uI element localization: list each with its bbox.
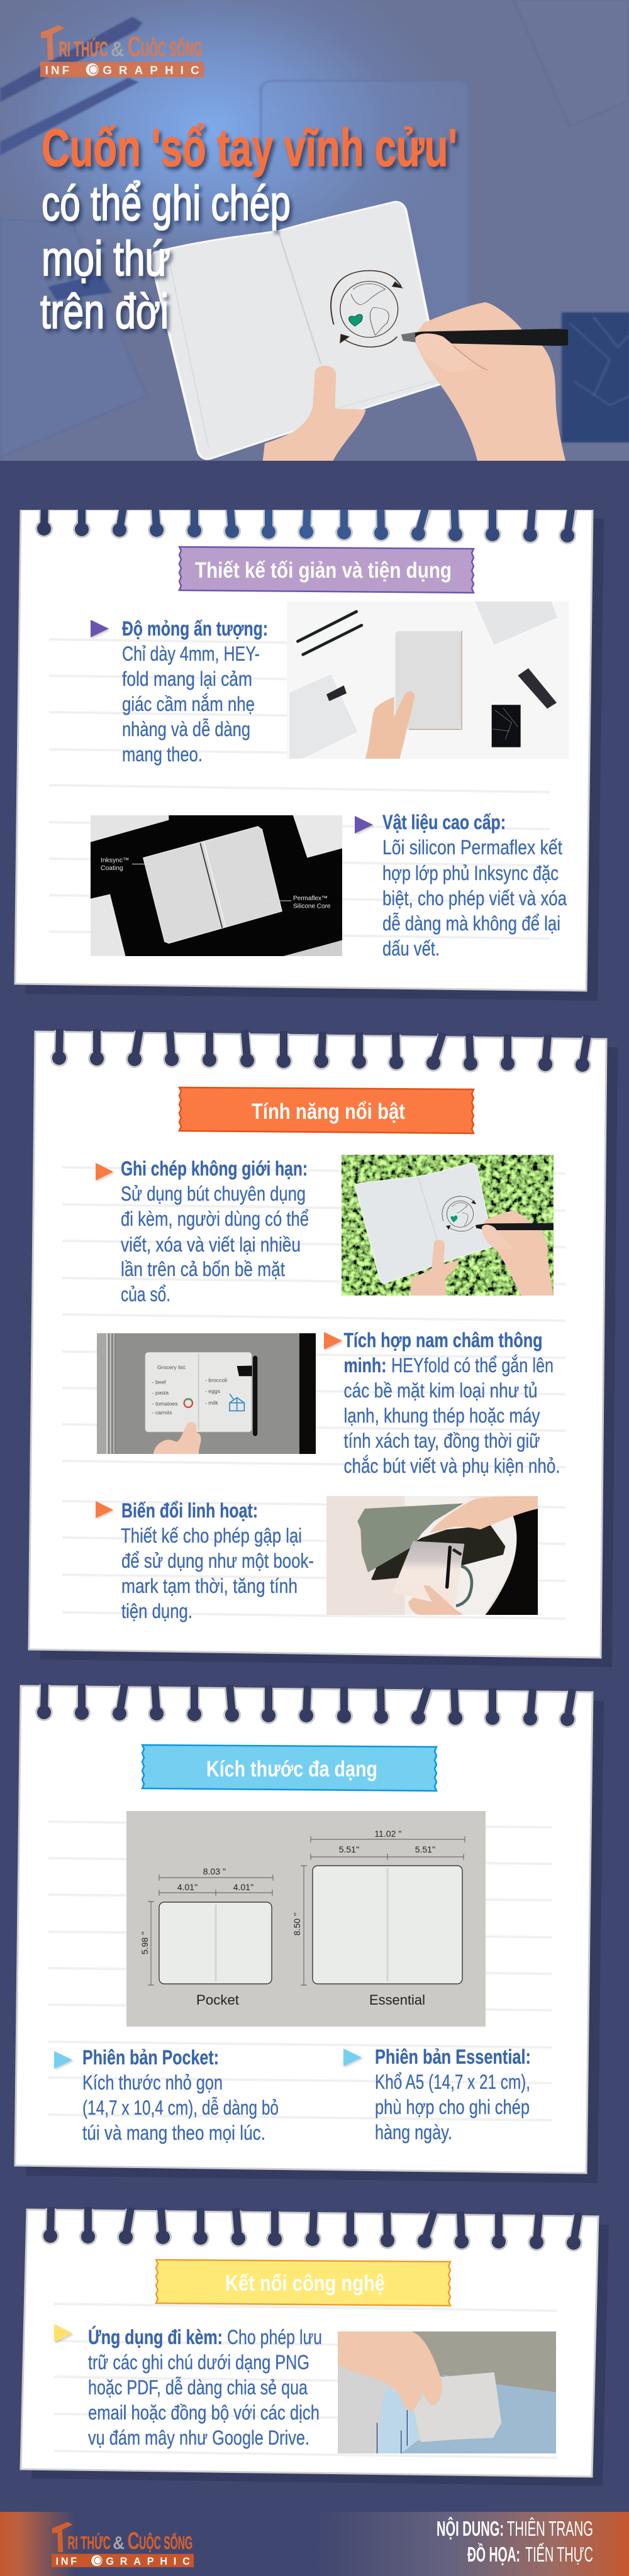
text: phiên bản essential: hàng ngày. xyxy=(375,2121,452,2144)
text: tích hợp nam châm thông minh: Tích hợp nam châm thông xyxy=(343,1329,542,1351)
icon: orange triangle xyxy=(324,1332,342,1350)
text: phiên bản pocket: Phiên bản Pocket: xyxy=(82,2046,219,2069)
text: biến đổi linh hoạt: Thiết kế cho phép gập lại xyxy=(121,1524,302,1547)
footer logo: INF xyxy=(56,2556,77,2567)
logo: Tri Thuc & Cuoc Song Infographic: & xyxy=(111,38,124,61)
footer logo: UỘC SỐNG xyxy=(139,2532,192,2553)
text: tích hợp nam châm thông minh: minh: xyxy=(343,1354,386,1377)
text: ghi chép không giới hạn: Sử dụng bút chuyên dụng xyxy=(121,1182,306,1205)
binder rings xyxy=(59,1029,587,1065)
icon: blue triangle xyxy=(343,2049,362,2066)
text: tích hợp nam châm thông minh: các bề mặt kim loại như tủ xyxy=(343,1379,537,1402)
text: tích hợp nam châm thông minh: chắc bút viết và phụ kiện nhỏ. xyxy=(343,1455,560,1477)
text: vật liệu cao cấp xyxy=(355,811,567,960)
text: tích hợp nam châm thông minh: HEYfold có thể gắn lên xyxy=(391,1354,554,1377)
text: độ mỏng ấn tượng: nhàng và dễ dàng xyxy=(122,718,250,740)
footer band xyxy=(0,2512,629,2576)
icon: orange triangle xyxy=(96,1501,113,1518)
hero image xyxy=(0,0,629,461)
text: phiên bản essential: phù hợp cho ghi chép xyxy=(375,2096,530,2118)
panel: thiết kế tối giản xyxy=(0,461,629,1001)
photo: notebook on fridge door xyxy=(97,1333,316,1454)
icon: purple triangle xyxy=(355,816,373,834)
credits xyxy=(437,2516,593,2566)
heading badge: yellow xyxy=(156,2260,450,2306)
heading badge: orange xyxy=(179,1087,474,1133)
text: vật liệu cao cấp: biệt, cho phép viết và xóa xyxy=(382,887,567,910)
dimension lines xyxy=(140,1829,465,1985)
title line 4: trên đời xyxy=(40,283,169,339)
text: ứng dụng đi kèm xyxy=(54,2324,322,2449)
heading badge: yellow: Kết nối công nghệ xyxy=(225,2271,385,2296)
text: biến đổi linh hoạt xyxy=(96,1499,314,1622)
dimension lines: 5.51'' xyxy=(415,1844,435,1854)
heading badge: light blue xyxy=(142,1745,437,1791)
text: phiên bản essential xyxy=(343,2045,531,2144)
icon: purple triangle xyxy=(91,620,109,637)
left hand xyxy=(263,366,366,461)
text: ghi chép không giới hạn: của sổ. xyxy=(121,1283,170,1306)
photo: notebook on fridge door: - eggs xyxy=(205,1388,221,1394)
text: ứng dụng đi kèm: Cho phép lưu xyxy=(227,2326,322,2348)
text: ứng dụng đi kèm: email hoặc đồng bộ với các dịch xyxy=(88,2401,320,2424)
text: vật liệu cao cấp: Lõi silicon Permaflex kết xyxy=(382,836,562,859)
text: ghi chép không giới hạn xyxy=(96,1157,309,1306)
dimension lines: 4.01'' xyxy=(233,1882,253,1892)
text: vật liệu cao cấp: dễ dàng mà không để lại xyxy=(382,912,560,935)
photo: Inksync and Permaflex layers: Coating xyxy=(101,865,123,872)
photo: accessories flat lay xyxy=(287,602,569,759)
text: độ mỏng ấn tượng xyxy=(91,617,268,766)
pocket notebook xyxy=(159,1902,272,2008)
footer logo: GRAPHIC xyxy=(106,2556,190,2567)
binder rings xyxy=(44,500,572,536)
text: tích hợp nam châm thông minh xyxy=(324,1329,560,1477)
essential notebook: Essential xyxy=(369,1992,425,2008)
photo: notebook on fridge door: - carrots xyxy=(152,1409,172,1416)
photo: notebook on fridge door: - beef xyxy=(152,1379,166,1385)
icon: yellow triangle xyxy=(54,2324,72,2342)
heading badge: orange: Tính năng nổi bật xyxy=(252,1099,405,1124)
photo: writing on notebook against foliage xyxy=(342,1155,554,1296)
binder rings xyxy=(50,2207,579,2243)
text: biến đổi linh hoạt: tiện dụng. xyxy=(121,1600,192,1622)
logo: Tri Thuc & Cuoc Song Infographic: UỘC SỐNG xyxy=(141,36,203,61)
dimension lines: 5.98 '' xyxy=(140,1932,150,1954)
text: vật liệu cao cấp: Vật liệu cao cấp: xyxy=(382,811,506,834)
text: độ mỏng ấn tượng: giác cầm nắm nhẹ xyxy=(122,693,255,715)
credits: ĐỒ HỌA: xyxy=(467,2543,520,2566)
text: ghi chép không giới hạn: viết, xóa và viết lại nhiều xyxy=(121,1233,301,1256)
binder rings xyxy=(44,1683,572,1719)
logo: Tri Thuc & Cuoc Song Infographic: C xyxy=(128,30,142,62)
heading badge: purple xyxy=(179,547,474,593)
photo: notebook in jeans pocket xyxy=(338,2331,556,2453)
photo: Inksync and Permaflex layers: Inksync™ xyxy=(101,857,129,864)
footer logo: RI THỨC xyxy=(68,2532,111,2553)
text: độ mỏng ấn tượng: Chỉ dày 4mm, HEY- xyxy=(122,642,260,665)
dimension lines: 4.01'' xyxy=(177,1882,198,1892)
text: tích hợp nam châm thông minh: lạnh, khung thép hoặc máy xyxy=(343,1404,540,1427)
photo: Inksync and Permaflex layers: Permaflex™ xyxy=(293,895,328,902)
dimension lines: 11.02 '' xyxy=(374,1829,402,1839)
hero title xyxy=(40,118,457,339)
pocket notebook: Pocket xyxy=(196,1992,239,2008)
photo: notebook slipped into bag xyxy=(326,1496,538,1615)
panel: kích thước đa dạng xyxy=(15,1683,604,2183)
text: phiên bản essential: Khổ A5 (14,7 x 21 cm), xyxy=(375,2071,530,2093)
text: ứng dụng đi kèm: Ứng dụng đi kèm: xyxy=(88,2326,223,2348)
dimension lines: 8.03 '' xyxy=(203,1866,226,1876)
dimension lines: 5.51'' xyxy=(339,1844,359,1854)
photo: notebook on fridge door: - milk xyxy=(205,1399,218,1406)
text: ứng dụng đi kèm: vụ đám mây như Google Drive. xyxy=(88,2426,309,2449)
credits: NỘI DUNG: xyxy=(437,2516,504,2540)
logo: Tri Thuc & Cuoc Song Infographic xyxy=(40,25,204,77)
notebook xyxy=(152,202,442,459)
text: biến đổi linh hoạt: để sử dụng như một book- xyxy=(121,1549,314,1572)
heading badge: purple: Thiết kế tối giản và tiện dụng xyxy=(195,558,452,583)
text: ghi chép không giới hạn: Ghi chép không giới hạn: xyxy=(121,1157,308,1180)
footer logo xyxy=(52,2522,194,2567)
text: vật liệu cao cấp: dấu vết. xyxy=(382,937,440,960)
text: ghi chép không giới hạn: lần trên cả bốn bề mặt xyxy=(121,1258,285,1280)
text: độ mỏng ấn tượng: fold mang lại cảm xyxy=(122,668,252,690)
title line 3: mọi thứ xyxy=(42,231,170,286)
logo: Tri Thuc & Cuoc Song Infographic: GRAPHIC xyxy=(103,63,199,77)
panel: kết nối công nghệ xyxy=(21,2207,609,2486)
text: biến đổi linh hoạt: Biến đổi linh hoạt: xyxy=(121,1499,258,1522)
text: độ mỏng ấn tượng: mang theo. xyxy=(122,743,203,766)
text: phiên bản pocket xyxy=(54,2046,279,2144)
text: vật liệu cao cấp: hợp lớp phủ Inksync đặc xyxy=(382,862,559,884)
text: tích hợp nam châm thông minh: tính xách tay, đồng thời giữ xyxy=(343,1429,540,1452)
photo: notebook on fridge door: - tomatoes xyxy=(152,1401,178,1407)
text: ghi chép không giới hạn: đi kèm, người dùng có thể xyxy=(121,1208,309,1230)
text: ứng dụng đi kèm: hoặc PDF, dễ dàng chia sẻ qua xyxy=(88,2376,308,2399)
globe drawing xyxy=(331,270,403,347)
photo: notebook on fridge door: - pasta xyxy=(152,1389,169,1395)
title line 2: có thể ghi chép xyxy=(42,175,291,231)
text: biến đổi linh hoạt: mark tạm thời, tăng tính xyxy=(121,1575,298,1597)
photo: Inksync and Permaflex layers: Silicone Core xyxy=(293,903,331,910)
essential notebook xyxy=(313,1866,462,2008)
text: phiên bản pocket: Kích thước nhỏ gọn xyxy=(82,2071,223,2094)
photo: notebook on fridge door: - broccoli xyxy=(205,1377,227,1384)
text: phiên bản essential: Phiên bản Essential: xyxy=(375,2045,531,2068)
text: độ mỏng ấn tượng: Độ mỏng ấn tượng: xyxy=(122,617,268,640)
logo: Tri Thuc & Cuoc Song Infographic: RI THỨC xyxy=(58,37,108,61)
title line 1: Cuốn 'sổ tay vĩnh cửu' xyxy=(42,118,457,177)
chart: size diagram xyxy=(126,1811,486,2027)
photo: notebook on fridge door: Grocery list: xyxy=(157,1364,186,1370)
logo: Tri Thuc & Cuoc Song Infographic: INF xyxy=(45,63,69,77)
footer logo: C xyxy=(128,2528,140,2555)
icon: orange triangle xyxy=(96,1163,113,1181)
text: phiên bản pocket: túi và mang theo mọi lúc. xyxy=(82,2122,265,2144)
dimension lines: 8.50 '' xyxy=(292,1913,302,1935)
icon: blue triangle xyxy=(54,2051,72,2069)
text: phiên bản pocket: (14,7 x 10,4 cm), dễ dàng bỏ xyxy=(82,2096,279,2119)
photo: Inksync and Permaflex layers xyxy=(91,815,342,956)
heading badge: light blue: Kích thước đa dạng xyxy=(206,1757,377,1781)
footer logo: & xyxy=(113,2533,125,2553)
right hand with pen xyxy=(401,302,568,461)
panel: tính năng nổi bật xyxy=(29,1029,618,1667)
text: ứng dụng đi kèm: trữ các ghi chú dưới dạng PNG xyxy=(88,2351,309,2374)
